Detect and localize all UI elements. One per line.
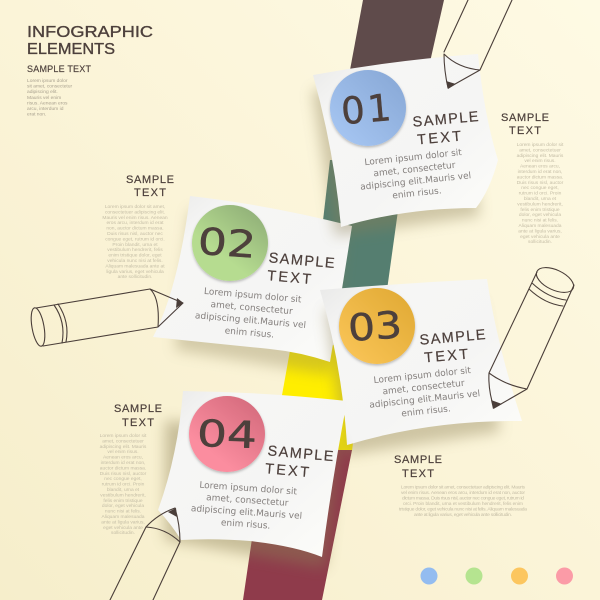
heading 01: SAMPLE (412, 109, 479, 131)
heading 01 (412, 109, 481, 149)
side note: 04: TEXT (122, 417, 154, 429)
side note: 04: blandit, urna et (107, 487, 140, 493)
side note: 01: ante at ligula varius, (518, 228, 562, 234)
side note: 01: TEXT (509, 125, 541, 137)
subtitle: SAMPLE TEXT (27, 64, 92, 74)
heading 01: TEXT (417, 129, 462, 148)
side note: 01: SAMPLE (501, 112, 549, 124)
body text 03: adipiscing elit.Mauris vel (369, 389, 481, 411)
intro text: adipiscing elit. (27, 89, 58, 95)
side note: 04: auctor dictum massa. (100, 465, 146, 471)
body text 04: enim risus. (221, 518, 271, 532)
panel: note 01 (312, 54, 498, 236)
heading 03: TEXT (424, 347, 469, 366)
body text 03 (366, 365, 482, 423)
side note: 01: vestibulum hendrerit, (517, 201, 563, 207)
icon: pencil right (489, 262, 577, 409)
side note: 01: dolor, eget vehicula (519, 212, 561, 218)
side note: 03: TEXT (402, 468, 434, 480)
stripe: maroon (243, 450, 352, 600)
side note: 01: interdum id erat non, (518, 169, 562, 175)
stripe: brown (350, 0, 444, 70)
side note: 01 (501, 112, 564, 245)
legend: blue dot (420, 568, 438, 584)
side note: 04: Lorem ipsum dolor sit (100, 433, 147, 439)
intro text: Lorem ipsum dolor (27, 78, 68, 84)
body text 02: amet, consectetur (210, 300, 293, 317)
side note: 01: blandit, urna et (524, 196, 557, 202)
title block (27, 24, 153, 118)
heading 02: SAMPLE (268, 250, 336, 272)
side note: 02: Lorem ipsum dolor sit amet, (105, 204, 165, 210)
side note: 04 (100, 403, 162, 536)
side note: 01: rutrum id orci. Proin (519, 191, 562, 197)
intro text: risus. Aenean eros (27, 100, 68, 106)
icon: number circle 03 (339, 288, 415, 364)
side note: 04: Aliquam malesuada (102, 514, 145, 520)
side note: 03: tristique dolor, eget vehicula nunc nisi at felis. Aliquam malesuada (399, 506, 527, 512)
body text 01: amet, consectetur (373, 161, 456, 179)
legend: pink dot (556, 568, 573, 584)
body text 04 (190, 480, 304, 534)
side note: 04: dolor, eget vehicula (102, 503, 144, 509)
side note: 02: vehicula nunc nisi at felis. (107, 258, 163, 264)
side note: 01: amet, consectetuer (519, 147, 561, 153)
side note: 04: SAMPLE (114, 403, 162, 415)
panel: note 02 (153, 196, 352, 375)
side note: 02: Duis risus nisl, auctor nec (107, 231, 163, 237)
icon: number circle 03: 03 (347, 303, 403, 350)
body text 04: amet, consectetur (206, 493, 289, 509)
side note: 02: Aliquam malesuada ante at (105, 263, 165, 269)
side note: 03: Lorem ipsum dolor sit amet, consectetuer adipiscing elit. Mauris (401, 484, 526, 490)
icon: pencil top right (444, 0, 512, 89)
body text 02: enim risus. (224, 326, 274, 341)
side note: 04: Aenean eros arcu, (103, 455, 143, 461)
heading 02: TEXT (266, 268, 312, 288)
side note: 01: felis enim tristique (520, 207, 560, 213)
body text 03: enim risus. (401, 404, 451, 419)
icon: pencil left (29, 289, 183, 347)
side note: 01: auctor dictum massa. (517, 174, 563, 180)
side note: 04: adipiscing elit. Mauris (100, 444, 147, 450)
side note: 01: nec congue eget, (521, 185, 559, 191)
side note: 04: felis enim tristique (103, 498, 143, 504)
legend: orange dot (511, 568, 528, 584)
heading 04: TEXT (264, 461, 310, 481)
side note: 01: Duis risus nisl, auctor (517, 180, 564, 186)
intro text: Mauris vel enim (27, 95, 61, 101)
icon: number circle 01 (330, 70, 406, 146)
stripe: yellow (272, 345, 365, 451)
intro text: erat non. (27, 112, 46, 118)
body text 03: amet, consectetur (382, 379, 465, 397)
body text 02 (193, 286, 309, 343)
legend dots (420, 568, 573, 584)
side note: 01: Lorem ipsum dolor sit (517, 142, 564, 148)
title: ELEMENTS (27, 41, 115, 58)
icon: pencil bottom (110, 508, 180, 600)
icon: number circle 02: 02 (197, 220, 257, 267)
side note: 01: adipiscing elit. Mauris (517, 153, 564, 159)
side note: 01: Aliquam malesuada (519, 223, 562, 229)
side note: 04: eget vehicula ante (103, 525, 143, 531)
side note: 02: eros arcu, interdum id erat (106, 220, 164, 226)
body text 01: enim risus. (392, 186, 442, 201)
body text 02: Lorem ipsum dolor sit (204, 287, 302, 305)
side note: 02: ante sollicitudin. (118, 274, 152, 280)
side note: 02: Proin blandit, urna et (112, 242, 158, 248)
side note: 02: non, auctor dictum massa. (106, 226, 164, 232)
side note: 04: vel enim risus. (107, 449, 139, 455)
side note: 02: consectetuer adipiscing elit. (105, 209, 165, 215)
side note: 03: ante at ligula varius, eget vehicula ante sollicitudin. (414, 512, 512, 518)
body text 04: Lorem ipsum dolor sit (199, 481, 298, 497)
side note: 03: dictum massa. Duis risus nisl, auctor nec congue eget, rutrum id (402, 496, 524, 502)
icon: number circle 01: 01 (339, 86, 393, 133)
side note: 03: SAMPLE (394, 454, 442, 466)
panel: note 04 (158, 391, 347, 568)
heading 03: SAMPLE (419, 327, 486, 349)
heading 04 (264, 443, 334, 483)
side note: 01: nunc nisi at felis. (522, 218, 558, 224)
heading 04: SAMPLE (267, 443, 334, 465)
side note: 04: vestibulum hendrerit, (100, 492, 146, 498)
icon: number circle 04 (189, 396, 265, 472)
intro text (27, 78, 72, 118)
icon: number circle 02 (192, 205, 268, 281)
side note: 01: Aenean eros arcu, (520, 164, 560, 170)
side note: 02: ligula varius, eget vehicula (106, 269, 164, 275)
side note: 04: nec congue eget, (104, 476, 142, 482)
panel: note 03 (320, 279, 522, 455)
side note: 01: sollicitudin. (528, 239, 552, 245)
body text 04: adipiscing elit.Mauris vel (191, 504, 302, 522)
intro text: arcu, interdum id (27, 106, 64, 112)
stripe: green (315, 160, 405, 290)
side note: 02: congue eget, rutrum id orci. (105, 236, 165, 242)
body text 01: Lorem ipsum dolor sit (364, 148, 463, 168)
side note: 02: TEXT (134, 187, 166, 199)
side note: 02: enim tristique dolor, eget (108, 253, 162, 259)
title: INFOGRAPHIC (27, 24, 153, 41)
side note: 04: rutrum id orci. Proin (102, 482, 145, 488)
body text 02: adipiscing elit.Mauris vel (195, 311, 306, 331)
side note: 03: vel enim risus. Aenean eros arcu, interdum id erat non, auctor (401, 490, 525, 496)
side note: 04: amet, consectetuer (102, 438, 144, 444)
side note: 04: interdum id erat non, (101, 460, 145, 466)
side note: 04: Duis risus nisl, auctor (100, 471, 147, 477)
side note: 04: nunc nisi at felis. (105, 509, 141, 515)
side note: 03: orci. Proin blandit, urna et vestibulum hendrerit, felis enim (403, 501, 523, 507)
intro text: sit amet, consectetur (27, 84, 72, 90)
side note: 01: vel enim risus. (524, 158, 556, 164)
body text 01: adipiscing elit.Mauris vel (360, 171, 472, 193)
icon: number circle 04: 04 (196, 412, 258, 457)
heading 02 (266, 250, 336, 290)
side note: 02: vestibulum hendrerit, felis (107, 247, 163, 253)
body text 03: Lorem ipsum dolor sit (373, 366, 472, 386)
heading 03 (419, 327, 488, 367)
title (27, 24, 153, 58)
side note: 04: ante at ligula varius, (101, 519, 145, 525)
side note: 04: sollicitudin. (111, 530, 135, 536)
side note: 01: eget vehicula ante (520, 234, 560, 240)
side note: 02: Mauris vel enim risus. Aenean (102, 215, 168, 221)
side note: 02 (102, 174, 174, 280)
body text 01 (357, 147, 473, 205)
side note: 03 (394, 454, 527, 518)
legend: green dot (466, 568, 482, 584)
side note: 02: SAMPLE (126, 174, 174, 186)
